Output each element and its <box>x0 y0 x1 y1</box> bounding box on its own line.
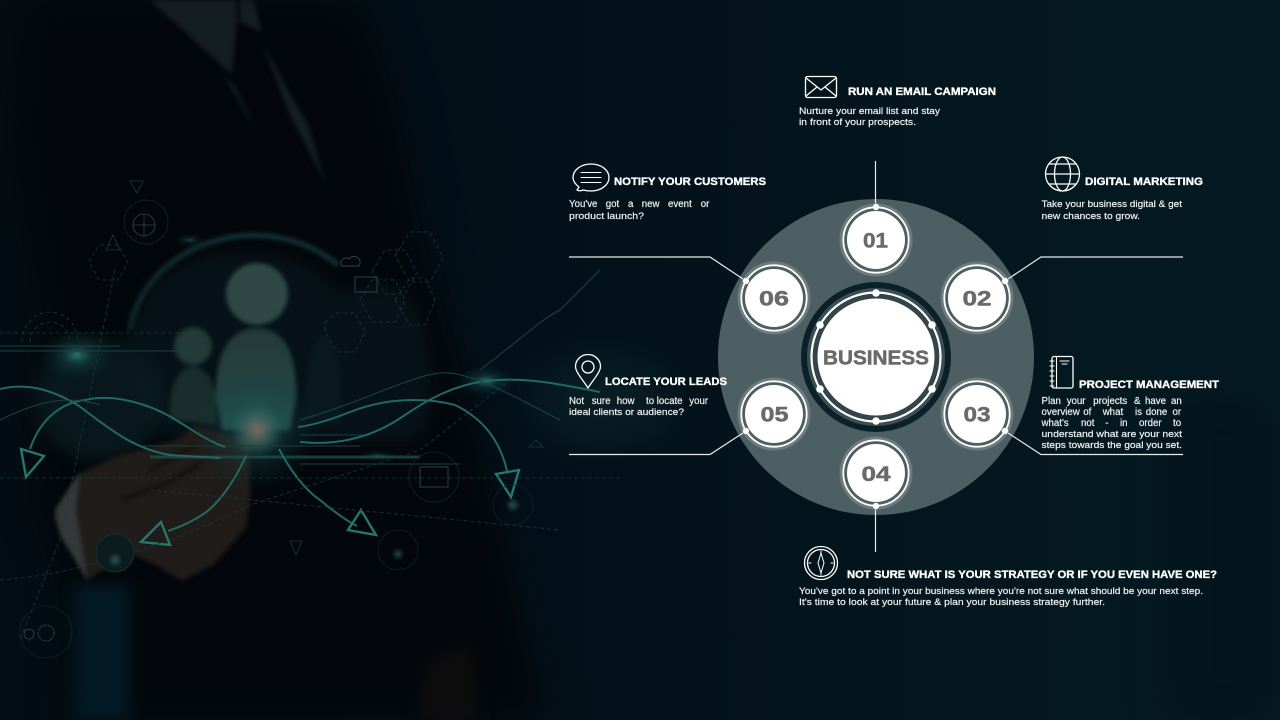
icon: notebook <box>1050 356 1073 388</box>
icon: envelope <box>806 76 836 98</box>
panel: project management <box>1040 356 1219 450</box>
node 03 <box>940 378 1014 450</box>
node 02: 02 <box>962 288 992 310</box>
text: project management description: or <box>1172 407 1182 418</box>
node 04: 04 <box>862 463 891 486</box>
text: project management description: projects <box>1093 396 1127 407</box>
text: project management description: what <box>1102 407 1123 418</box>
text: digital marketing description <box>1042 199 1182 221</box>
text: project management description: have <box>1145 396 1166 407</box>
connector lines <box>569 161 1183 552</box>
text: strategy description: You've got to a point in your business where you're not sure what should be your next step. <box>799 586 1203 596</box>
text: strategy description <box>799 586 1203 607</box>
text: locate your leads description: Not <box>569 396 584 407</box>
icon: compass <box>804 546 838 580</box>
node 01 <box>840 204 912 276</box>
text: project management description: understand what are your next <box>1042 429 1182 439</box>
text: project management description: order <box>1139 418 1162 429</box>
text: project management description: & <box>1134 396 1141 407</box>
text: project management description: is <box>1135 407 1142 418</box>
centre node: BUSINESS <box>801 282 951 432</box>
text: notify your customers description: You've <box>569 199 597 210</box>
text: locate your leads description <box>569 396 709 417</box>
text: email campaign description: in front of your prospects. <box>799 117 916 127</box>
text: project management description: in <box>1120 418 1128 429</box>
text: project management description: your <box>1067 396 1086 407</box>
text: project management description: steps towards the goal you set. <box>1042 440 1182 450</box>
cloud shape behind figures <box>35 236 431 460</box>
faint dashed interface graphics <box>0 181 620 658</box>
lower hand shadow <box>418 645 478 720</box>
text: notify your customers description <box>569 199 710 221</box>
heading: notify your customers: NOTIFY YOUR CUSTOMERS <box>614 176 767 188</box>
text: project management description: overview <box>1042 407 1081 418</box>
people figures <box>170 263 342 430</box>
centre node: BUSINESS: BUSINESS <box>823 348 929 370</box>
text: project management description: of <box>1083 407 1092 418</box>
panel: digital marketing <box>1042 157 1203 221</box>
text: notify your customers description: or <box>701 199 710 210</box>
heading: project management: PROJECT MANAGEMENT <box>1079 379 1219 391</box>
panel: locate your leads <box>569 354 728 417</box>
text: locate your leads description: your <box>689 396 709 407</box>
node 06 <box>738 262 810 334</box>
panel: run an email campaign <box>799 76 996 127</box>
text: notify your customers description: product launch? <box>569 211 644 221</box>
panel: strategy <box>799 546 1217 607</box>
text: project management description: an <box>1171 396 1182 407</box>
text: digital marketing description: new chances to grow. <box>1042 211 1140 221</box>
heading: email campaign: RUN AN EMAIL CAMPAIGN <box>848 86 996 98</box>
node 02 <box>940 262 1014 334</box>
text: locate your leads description: ideal clients or audience? <box>569 407 684 417</box>
light flares <box>39 233 670 492</box>
heading: strategy: NOT SURE WHAT IS YOUR STRATEGY OR IF YOU EVEN HAVE ONE? <box>847 569 1217 581</box>
text: project management description <box>1040 396 1182 450</box>
translucent grey disc <box>718 199 1034 515</box>
text: locate your leads description: sure <box>592 396 611 407</box>
heading: locate your leads: LOCATE YOUR LEADS <box>605 376 728 388</box>
text: project management description: done <box>1146 407 1167 418</box>
node 01: 01 <box>863 230 888 252</box>
node 05: 05 <box>760 404 789 426</box>
node 05 <box>738 378 810 450</box>
text: notify your customers description: new <box>642 199 660 210</box>
heading: digital marketing: DIGITAL MARKETING <box>1085 176 1203 188</box>
text: notify your customers description: got <box>606 199 619 210</box>
text: project management description: Plan <box>1042 396 1061 407</box>
panel: notify your customers <box>569 164 767 221</box>
text: notify your customers description: event <box>668 199 692 210</box>
icon: speech bubble <box>573 164 609 191</box>
text: locate your leads description: locate <box>657 396 683 407</box>
shirt collar and tie <box>150 0 326 184</box>
flowing curves with arrows <box>0 270 600 545</box>
icon: globe <box>1046 157 1080 191</box>
text: digital marketing description: Take your business digital & get <box>1042 199 1182 209</box>
suit silhouette <box>15 0 545 720</box>
text: project management description: to <box>1173 418 1181 429</box>
text: locate your leads description: how <box>617 396 635 407</box>
node 03: 03 <box>964 404 990 426</box>
node 06: 06 <box>759 288 789 310</box>
text: locate your leads description: to <box>646 396 654 407</box>
text: project management description: not <box>1081 418 1095 429</box>
hub diagram: business cycle <box>569 161 1183 552</box>
node 04 <box>840 436 912 510</box>
horizontal light streaks <box>0 346 460 464</box>
text: email campaign description <box>799 106 940 127</box>
text: strategy description: It's time to look at your future & plan your business strategy further. <box>799 597 1105 607</box>
text: project management description: what's <box>1040 418 1069 429</box>
text: notify your customers description: a <box>628 199 634 210</box>
text: project management description: - <box>1105 418 1109 429</box>
hand <box>54 424 250 581</box>
icon: map pin <box>576 354 600 388</box>
text: email campaign description: Nurture your email list and stay <box>799 106 940 116</box>
